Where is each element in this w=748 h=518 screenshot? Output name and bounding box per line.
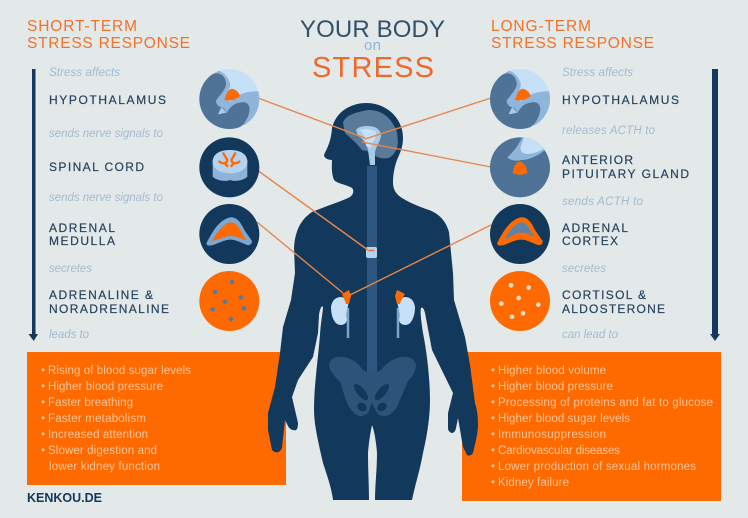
text block: long-term pathway: ALDOSTERONE	[562, 302, 665, 316]
short-term effects list: Higher blood pressure	[48, 381, 163, 393]
text block: long-term pathway: Stress affects	[562, 67, 633, 79]
title: YOUR BODY	[300, 16, 445, 43]
left adrenal gland	[342, 290, 351, 304]
heading: long-term stress response: LONG-TERM	[491, 18, 591, 35]
right kidney	[395, 290, 415, 338]
heading: short-term stress response: STRESS RESPONSE	[27, 35, 190, 52]
long-term effects list: Immunosuppression	[498, 429, 606, 441]
pelvis openings	[352, 382, 391, 413]
text block: long-term pathway: CORTEX	[562, 234, 618, 248]
long-term effects list: •	[491, 365, 495, 377]
short-term effects list: Rising of blood sugar levels	[48, 365, 191, 377]
short-term effects list: Slower digestion and	[48, 445, 157, 457]
text block: short-term pathway	[49, 67, 169, 341]
long-term effects list: Processing of proteins and fat to glucose	[498, 397, 713, 409]
text block: short-term pathway: leads to	[49, 329, 90, 341]
long-term effects list: Cardiovascular diseases	[498, 445, 620, 457]
short-term effects list: Faster metabolism	[48, 413, 146, 425]
long-term effects list: Higher blood pressure	[498, 381, 613, 393]
text block: long-term pathway: secretes	[562, 263, 606, 275]
long-term effects list: •	[491, 445, 495, 457]
text block: long-term pathway: HYPOTHALAMUS	[562, 93, 679, 107]
body silhouette	[268, 103, 478, 500]
left kidney	[331, 290, 351, 338]
text block: short-term pathway: NORADRENALINE	[49, 302, 169, 316]
right adrenal gland	[395, 290, 405, 304]
text block: short-term pathway: ADRENALINE &	[49, 288, 153, 302]
text block: short-term pathway: secretes	[49, 263, 92, 275]
long-term effects list: Higher blood sugar levels	[498, 413, 630, 425]
short-term effects list: lower kidney function	[49, 461, 160, 473]
panel: long-term effects	[462, 352, 721, 501]
icon: anterior pituitary gland	[490, 135, 550, 197]
text block: long-term pathway: releases ACTH to	[562, 125, 656, 137]
brand: kenkou.de: KENKOU.DE	[27, 491, 102, 505]
title	[300, 16, 445, 84]
long-term effects list: •	[491, 381, 495, 393]
short-term effects list: •	[41, 413, 45, 425]
text block: short-term pathway: sends nerve signals to	[49, 128, 164, 140]
short-term effects list: •	[41, 429, 45, 441]
text block: short-term pathway: Stress affects	[49, 67, 120, 79]
long-term effects list: •	[491, 461, 495, 473]
pelvis	[329, 357, 416, 416]
icon: adrenal medulla	[199, 204, 259, 264]
long-term effects list: •	[491, 477, 495, 489]
title: STRESS	[312, 52, 434, 84]
arrow: long-term flow	[710, 69, 720, 341]
icon: adrenal cortex	[490, 204, 550, 264]
long-term effects list: •	[491, 397, 495, 409]
short-term effects list: Faster breathing	[48, 397, 133, 409]
short-term effects list: •	[41, 365, 45, 377]
heading: long-term stress response: STRESS RESPONSE	[491, 35, 654, 52]
text block: short-term pathway: SPINAL CORD	[49, 160, 144, 174]
icon: cortisol particles	[490, 271, 550, 331]
text block: long-term pathway: CORTISOL &	[562, 288, 646, 302]
heading: short-term stress response	[27, 18, 190, 52]
text block: long-term pathway	[562, 67, 689, 341]
icon: spinal cord	[199, 137, 259, 197]
text block: short-term pathway: HYPOTHALAMUS	[49, 93, 166, 107]
text block: short-term pathway: MEDULLA	[49, 234, 115, 248]
brain	[343, 110, 398, 165]
spinal cord	[367, 166, 377, 378]
text block: short-term pathway: ADRENAL	[49, 221, 115, 235]
body figure	[268, 103, 478, 500]
long-term effects list: Lower production of sexual hormones	[498, 461, 696, 473]
text block: short-term pathway: sends nerve signals to	[49, 192, 164, 204]
title: on	[364, 37, 381, 54]
long-term effects list: •	[491, 429, 495, 441]
heading: long-term stress response	[491, 18, 654, 52]
panel: short-term effects	[27, 352, 286, 485]
long-term effects list: Kidney failure	[498, 477, 569, 489]
long-term effects list: Higher blood volume	[498, 365, 606, 377]
heading: short-term stress response: SHORT-TERM	[27, 18, 137, 35]
icon: adrenaline particles	[199, 271, 259, 331]
text block: long-term pathway: ANTERIOR	[562, 153, 633, 167]
short-term effects list: •	[41, 445, 45, 457]
icon: long-term hypothalamus	[490, 69, 550, 129]
connector lines	[257, 98, 491, 295]
short-term effects list: •	[41, 397, 45, 409]
short-term effects list	[41, 365, 191, 473]
text block: long-term pathway: can lead to	[562, 329, 619, 341]
spinal segment	[366, 247, 377, 258]
short-term effects list: •	[41, 381, 45, 393]
long-term effects list	[491, 365, 713, 489]
long-term effects list: •	[491, 413, 495, 425]
text block: long-term pathway: ADRENAL	[562, 221, 628, 235]
icon: short-term hypothalamus	[199, 69, 260, 129]
arrow: short-term flow	[28, 69, 38, 341]
text block: long-term pathway: PITUITARY GLAND	[562, 167, 689, 181]
text block: long-term pathway: sends ACTH to	[562, 196, 644, 208]
short-term effects list: Increased attention	[48, 429, 148, 441]
